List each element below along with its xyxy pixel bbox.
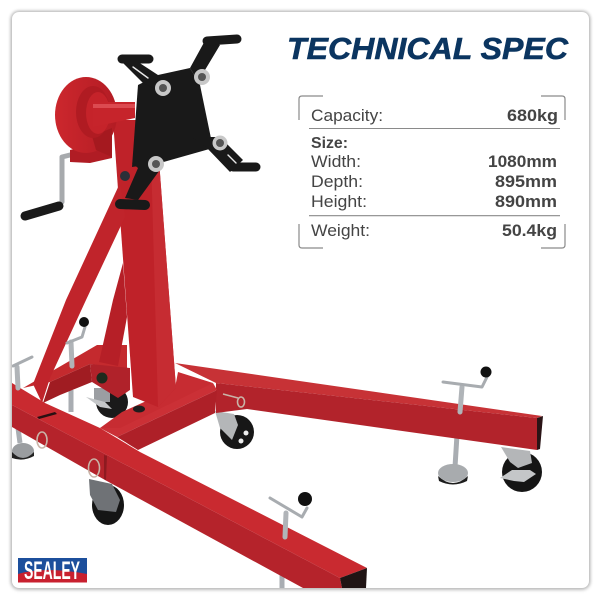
row: width (311, 153, 557, 171)
base bolt and brake knob (96, 372, 145, 412)
row: capacity: 680kg (507, 107, 558, 125)
row: weight (311, 222, 557, 240)
row: width: 1080mm (488, 153, 557, 171)
logo: Sealey: SEALEY (24, 557, 80, 585)
row: weight: Weight: (311, 222, 370, 240)
leveller pins and feet behind the frame (12, 390, 468, 588)
central column (113, 120, 176, 407)
row: width: Width: (311, 153, 361, 171)
mounting bolts and washers (120, 69, 228, 181)
row: weight: 50.4kg (502, 222, 557, 240)
row: height (311, 193, 557, 211)
casters (86, 386, 542, 525)
locating rings (37, 394, 244, 477)
adjustment T handles (13, 317, 492, 537)
row: capacity: Capacity: (311, 107, 383, 125)
row: capacity (311, 107, 558, 125)
right long beam (175, 363, 543, 450)
row: height: Height: (311, 193, 367, 211)
row: depth: Depth: (311, 173, 363, 191)
spec table (299, 96, 565, 248)
rear brace (99, 263, 127, 366)
winch hand crank (25, 153, 78, 216)
corner brackets (299, 96, 565, 248)
row: depth (311, 173, 557, 191)
logo: Sealey (18, 557, 87, 585)
row: depth: 895mm (495, 173, 557, 191)
crossbar beam (100, 372, 217, 450)
row: height: 890mm (495, 193, 557, 211)
black mounting head (120, 37, 256, 205)
front diagonal brace (33, 183, 125, 403)
row: size heading: Size: (311, 135, 348, 152)
back left crossbar (23, 345, 130, 403)
front main beam (12, 383, 367, 588)
winch housing (55, 77, 135, 163)
title: TECHNICAL SPEC (287, 31, 569, 66)
